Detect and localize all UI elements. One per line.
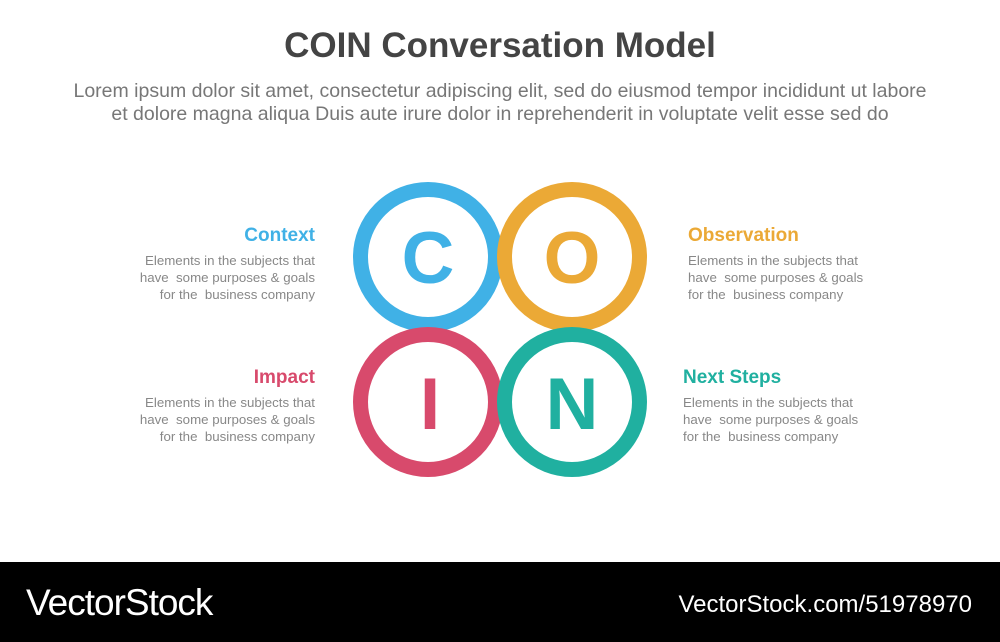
text: observation: Elements in the subjects that bbox=[688, 253, 858, 268]
title: COIN Conversation Model bbox=[284, 26, 716, 65]
circle N bbox=[504, 334, 640, 470]
circle O: O bbox=[544, 218, 600, 299]
text: next steps: have some purposes & goals bbox=[683, 412, 858, 427]
text: impact: Impact bbox=[254, 367, 315, 388]
text: context: Context bbox=[244, 225, 315, 246]
circle C bbox=[360, 190, 496, 324]
text: next steps bbox=[683, 367, 858, 444]
text: observation: have some purposes & goals bbox=[688, 270, 863, 285]
text: next steps: for the business company bbox=[683, 429, 838, 444]
circle I: I bbox=[420, 364, 440, 445]
circle C: C bbox=[402, 218, 454, 299]
footer logo: VectorStock bbox=[26, 582, 212, 623]
text: observation: for the business company bbox=[688, 287, 843, 302]
text: context bbox=[140, 225, 315, 302]
text: next steps: Elements in the subjects that bbox=[683, 395, 853, 410]
text: context: Elements in the subjects that bbox=[145, 253, 315, 268]
text: impact bbox=[140, 367, 315, 444]
text: context: for the business company bbox=[160, 287, 315, 302]
footer url: VectorStock.com/51978970 bbox=[678, 591, 972, 618]
footer bar bbox=[0, 562, 1000, 642]
circle I bbox=[360, 334, 496, 470]
text: impact: for the business company bbox=[160, 429, 315, 444]
text: next steps: Next Steps bbox=[683, 367, 781, 388]
circle O bbox=[504, 190, 640, 324]
circle N: N bbox=[546, 364, 598, 445]
text: impact: Elements in the subjects that bbox=[145, 395, 315, 410]
text: observation: Observation bbox=[688, 225, 799, 246]
subtitle: et dolore magna aliqua Duis aute irure dolor in reprehenderit in voluptate velit esse sed do bbox=[111, 103, 889, 125]
subtitle bbox=[73, 80, 927, 125]
text: context: have some purposes & goals bbox=[140, 270, 315, 285]
text: impact: have some purposes & goals bbox=[140, 412, 315, 427]
subtitle: Lorem ipsum dolor sit amet, consectetur adipiscing elit, sed do eiusmod tempor incididunt ut labore bbox=[73, 80, 927, 102]
text: observation bbox=[688, 225, 863, 302]
